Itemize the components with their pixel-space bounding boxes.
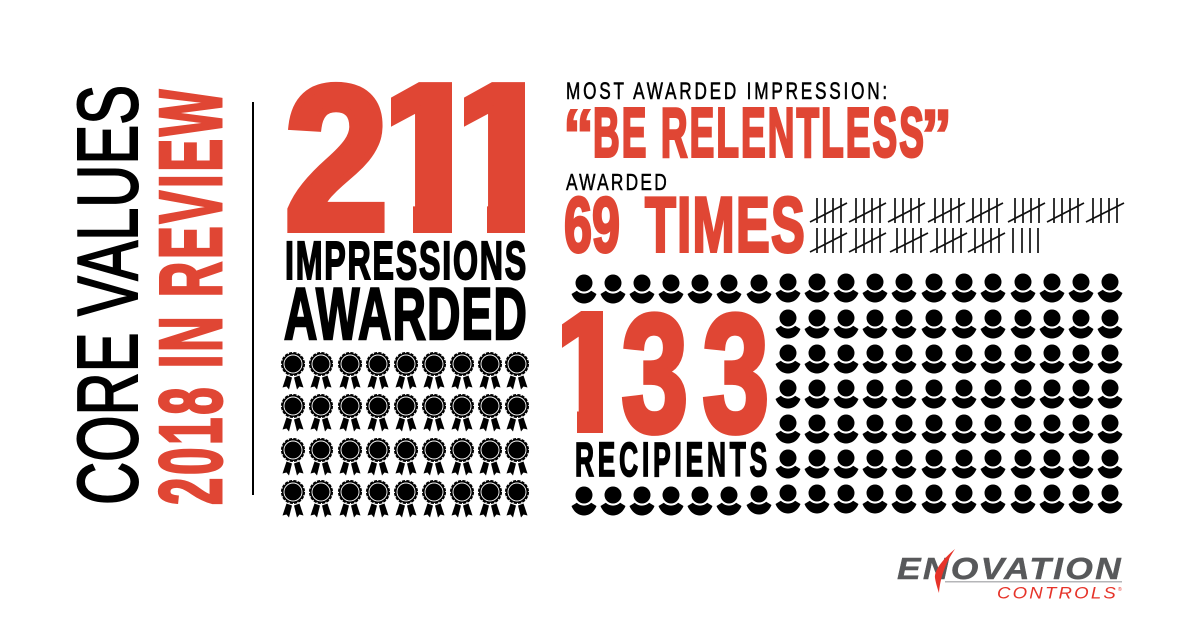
- tally marks: [810, 198, 1124, 253]
- logo: enovation controls: [897, 549, 1123, 602]
- quote: be relentless: “: [563, 96, 594, 176]
- quote: be relentless: [563, 94, 952, 176]
- label: impressions: IMPRESSIONS: [285, 231, 528, 291]
- icon grid: people: [572, 274, 1122, 516]
- logo: enovation controls: CONTROLS: [997, 584, 1118, 602]
- logo swoosh: [935, 549, 955, 593]
- stat: 69 times: TIMES: [645, 180, 806, 268]
- big number: 211: 1: [433, 38, 571, 276]
- logo: enovation controls: ENOVATION: [897, 551, 1123, 586]
- text: most awarded impression: MOST AWARDED IMPRESSION:: [566, 78, 890, 105]
- text: awarded: AWARDED: [566, 169, 669, 195]
- big number: 211: 1: [360, 38, 498, 276]
- logo: enovation controls: ®: [1118, 586, 1122, 593]
- big number: 133: 3: [702, 281, 769, 467]
- big number: 211: 2: [284, 44, 388, 273]
- big number: 133: [562, 311, 767, 436]
- quote: be relentless: ”: [921, 96, 952, 176]
- big number: 211: [287, 82, 525, 233]
- stat: 69 times: 69: [564, 180, 620, 268]
- icon grid: award ribbons: [282, 353, 528, 518]
- stat: 69 times: [564, 180, 806, 268]
- label: awarded: AWARDED: [284, 274, 528, 355]
- big number: 133: 1: [543, 277, 632, 468]
- big number: 133: 3: [622, 281, 688, 467]
- vertical divider: [252, 102, 254, 495]
- label: recipients: RECIPIENTS: [575, 434, 771, 487]
